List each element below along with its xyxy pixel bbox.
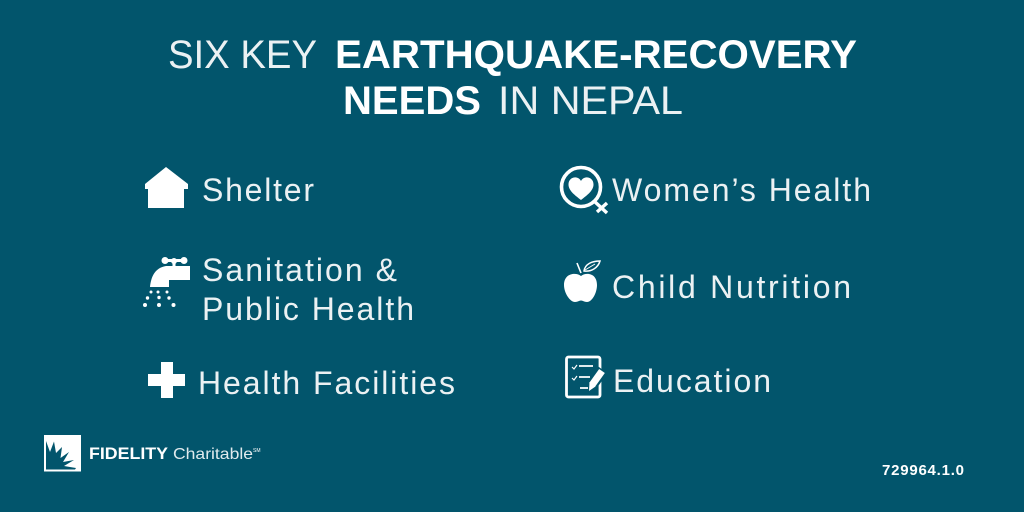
title: EARTHQUAKE-RECOVERY [335, 33, 857, 77]
label: education: Education [613, 363, 771, 399]
icon: apple [564, 261, 600, 302]
logo: fidelity charitable [44, 435, 260, 472]
label: sanitation and public health: Public Health [202, 291, 414, 327]
title [168, 33, 857, 123]
label: shelter: Shelter [202, 172, 314, 208]
icon: house [145, 167, 188, 208]
logo mark [44, 435, 81, 472]
title: SIX KEY [168, 33, 317, 77]
icon: checklist with pencil [566, 357, 603, 397]
label: women's health: Women’s Health [612, 172, 871, 208]
title: IN NEPAL [498, 79, 683, 123]
label: child nutrition: Child Nutrition [612, 269, 851, 305]
label: health facilities: Health Facilities [198, 365, 455, 401]
title: NEEDS [343, 79, 481, 123]
icon: medical cross [148, 362, 185, 398]
label: sanitation and public health: Sanitation & [202, 252, 397, 288]
logo: fidelity charitable: Charitable [173, 446, 253, 463]
logo: fidelity charitable: FIDELITY [89, 445, 168, 463]
icon: female symbol with heart [562, 168, 607, 213]
logo: fidelity charitable: SM [253, 448, 260, 454]
label: sanitation and public health [202, 252, 414, 327]
icon: water faucet [143, 257, 190, 307]
job code: 729964.1.0 [882, 462, 964, 479]
